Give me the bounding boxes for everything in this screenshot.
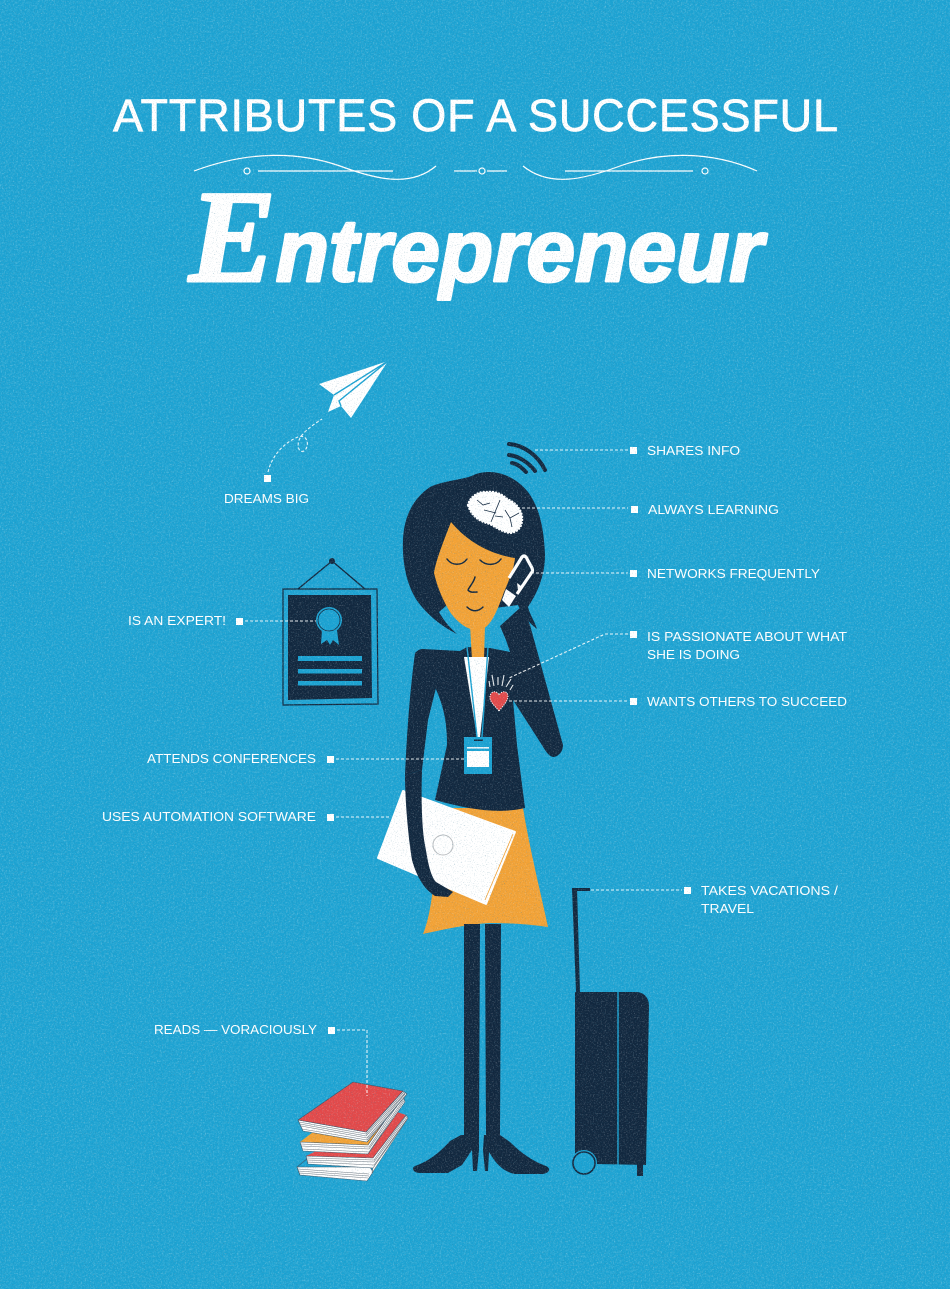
icon: framed certificate xyxy=(283,558,378,705)
right shoe xyxy=(483,1135,549,1174)
icon: suitcase xyxy=(571,888,649,1176)
skirt xyxy=(423,808,548,934)
label: is passionate xyxy=(509,629,847,678)
label: reads voraciously: READS — VORACIOUSLY xyxy=(154,1022,317,1037)
label: is passionate: SHE IS DOING xyxy=(647,647,740,662)
label: networks frequently: NETWORKS FREQUENTLY xyxy=(647,566,820,581)
label: is an expert xyxy=(128,613,316,628)
eyes nose mouth xyxy=(447,559,501,611)
label: reads voraciously xyxy=(154,1022,367,1096)
left shoe xyxy=(413,1135,479,1173)
label: takes vacations xyxy=(591,883,838,916)
third red book xyxy=(306,1112,406,1158)
label: takes vacations: TAKES VACATIONS / xyxy=(701,883,838,898)
label: uses automation software: USES AUTOMATION SOFTWARE xyxy=(102,809,316,824)
icon: wifi signal xyxy=(509,444,545,472)
label: networks frequently xyxy=(531,566,820,581)
label: uses automation software xyxy=(102,809,390,824)
icon: paper plane xyxy=(319,361,388,418)
label: shares info xyxy=(535,443,740,458)
jacket torso and right arm xyxy=(423,606,563,811)
jacket left sleeve lower xyxy=(405,770,453,897)
label: shares info: SHARES INFO xyxy=(647,443,740,458)
neck xyxy=(470,625,485,660)
blue lanyard and white collar xyxy=(464,657,489,737)
label: attends conferences: ATTENDS CONFERENCES xyxy=(147,751,316,766)
title: attributes of a successful: ATTRIBUTES OF A SUCCESSFUL xyxy=(113,90,838,141)
title: entrepreneur script: Entrepreneur xyxy=(188,163,768,310)
dashed flight path xyxy=(268,419,322,472)
label: takes vacations: TRAVEL xyxy=(701,901,754,916)
second orange book xyxy=(300,1127,380,1145)
id badge xyxy=(464,737,492,774)
phone xyxy=(502,556,532,607)
figure: woman entrepreneur xyxy=(378,472,563,1174)
bottom blue book xyxy=(297,1158,372,1180)
label: is an expert: IS AN EXPERT! xyxy=(128,613,226,628)
label: wants others to succeed xyxy=(509,694,847,709)
label: dreams big xyxy=(224,475,309,506)
label: is passionate: IS PASSIONATE ABOUT WHAT xyxy=(647,629,847,644)
label: always learning: ALWAYS LEARNING xyxy=(648,502,779,517)
label: always learning xyxy=(522,502,779,517)
brain xyxy=(468,492,522,533)
face xyxy=(434,522,515,629)
label: attends conferences xyxy=(147,751,464,766)
icon: book stack xyxy=(297,1082,408,1181)
top red book xyxy=(298,1091,407,1142)
legs xyxy=(464,924,480,1136)
decorative flourish divider xyxy=(194,155,757,179)
label: wants others to succeed: WANTS OTHERS TO SUCCEED xyxy=(647,694,847,709)
jacket left sleeve upper xyxy=(405,649,440,775)
label: dreams big: DREAMS BIG xyxy=(224,491,309,506)
laptop xyxy=(378,791,515,904)
heart xyxy=(489,675,513,711)
hair xyxy=(403,472,545,634)
